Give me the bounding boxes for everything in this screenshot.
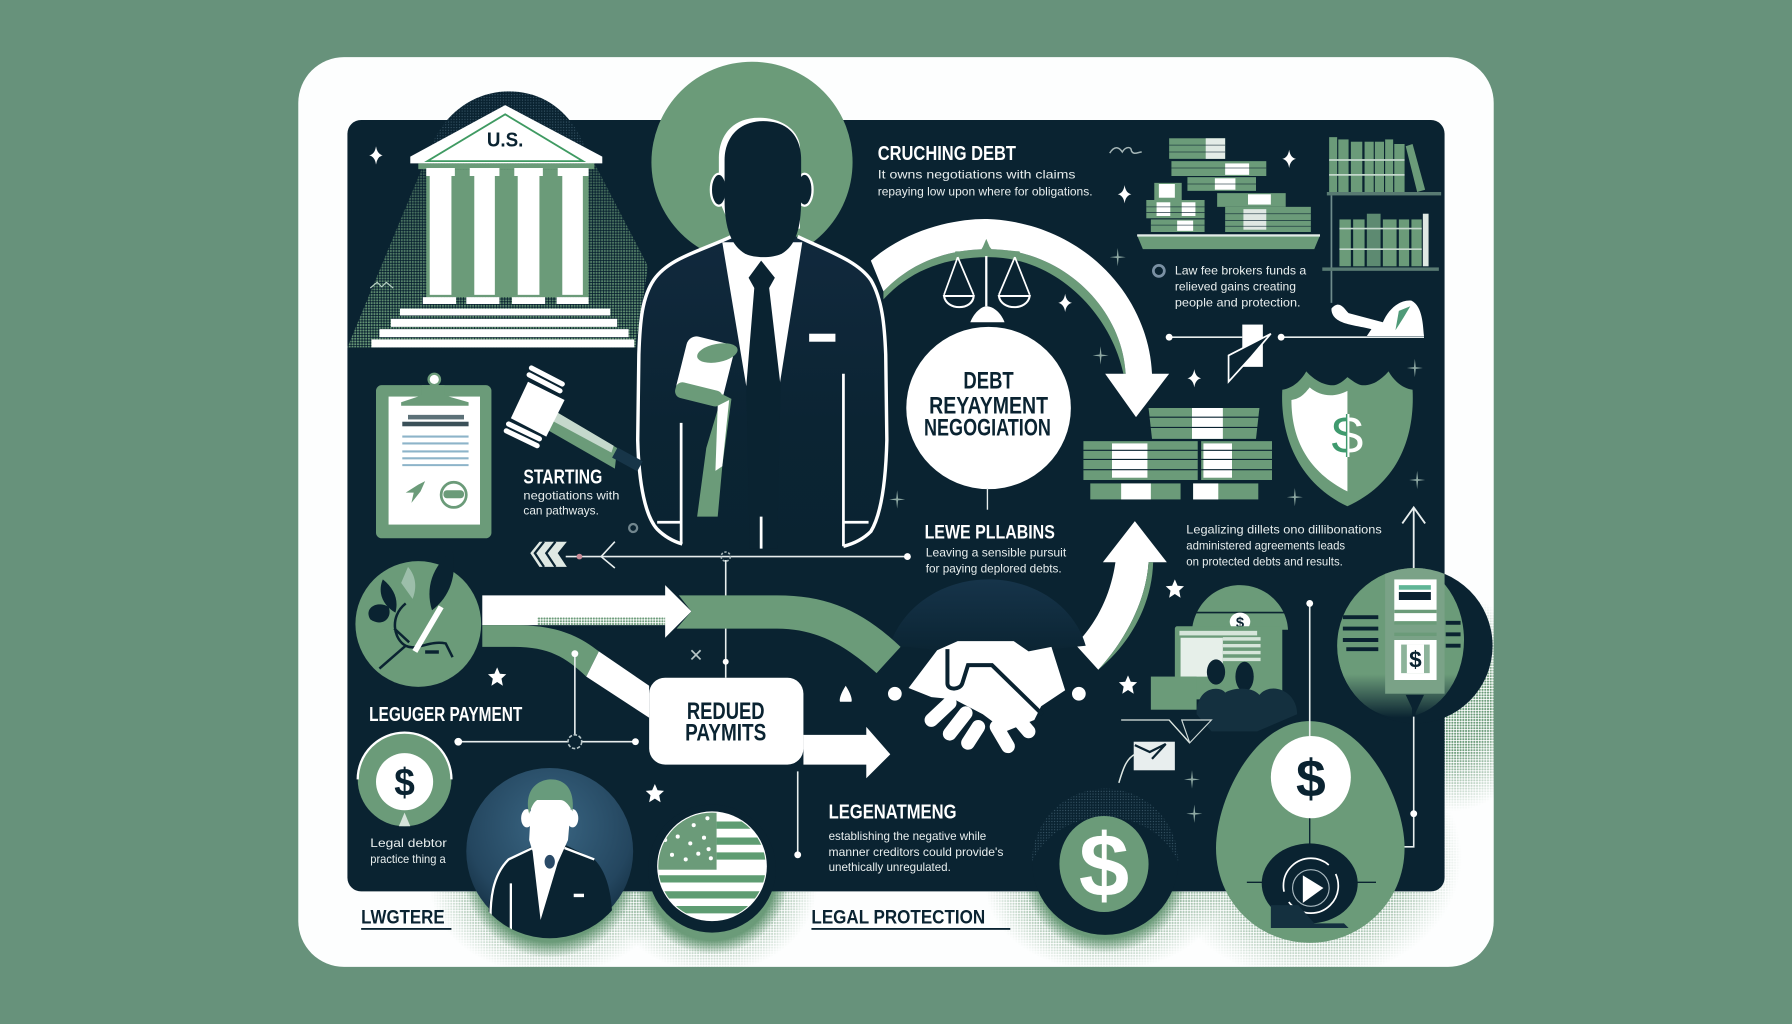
connector: circle to pleadings (986, 488, 988, 510)
text: crushing debt: CRUCHING DEBT (878, 142, 1016, 165)
text: starting: can pathways. (523, 503, 599, 517)
arrow: from box right (803, 727, 890, 778)
band: green upper curve (677, 595, 901, 673)
box: reduced payments: REDUED (687, 698, 765, 725)
pocket square (809, 334, 835, 342)
icon: dollar coin dark: $ (1079, 815, 1129, 915)
icon: dollar badge: $ (394, 761, 415, 804)
arrow: white horizontal (482, 585, 691, 638)
sleeve lines (657, 374, 869, 549)
panel: white card (298, 57, 1494, 967)
text: lewe pleadings: Leaving a sensible pursuit (926, 546, 1067, 560)
figure: man in suit (638, 118, 887, 549)
text: lewe pleadings (925, 521, 1067, 576)
icon: stars left (488, 650, 852, 802)
icon: audience and screen: $ (1236, 615, 1245, 631)
label: legal protection: LEGAL PROTECTION (811, 906, 985, 928)
arrow: curved up (1075, 521, 1167, 670)
icon: shield with dollar: $ (1331, 407, 1363, 466)
text: starting (523, 465, 619, 517)
shirt (722, 242, 802, 386)
icon: document circle (1337, 568, 1493, 718)
text: legenatmeng: establishing the negative while (829, 829, 987, 843)
text: legenatmeng: LEGENATMENG (829, 800, 957, 823)
decor: small ring (629, 524, 637, 532)
box: reduced payments: PAYMITS (685, 720, 766, 747)
box: reduced payments (649, 678, 803, 765)
icon: lawyer portrait (466, 768, 633, 949)
text: law note: relieved gains creating (1175, 279, 1296, 293)
arrow: small pennant (1121, 720, 1211, 743)
icon: small bird (370, 282, 393, 288)
icon: scales (944, 239, 1030, 322)
icon: sparkle near courthouse (369, 146, 383, 165)
icon: handshake (888, 579, 1086, 746)
text: law note: Law fee brokers funds a (1175, 263, 1307, 277)
text: legal note: Legal debtor (370, 836, 447, 850)
icon: hand with leaf (1331, 300, 1424, 336)
icon: green egg with dollar and video: $ (1296, 750, 1326, 809)
icon: sparkles around circle (889, 294, 1201, 509)
text: lewe pleadings: for paying deplored debts. (926, 562, 1062, 576)
icon: cash bundles (1083, 408, 1272, 499)
icon: envelope with curve (1119, 742, 1175, 783)
text: legal detail: administered agreements leads (1186, 539, 1345, 553)
arrow: chevrons pointing left (530, 542, 567, 567)
text: legal note (370, 836, 447, 866)
text: starting: STARTING (523, 465, 602, 488)
icon: gavel (506, 368, 640, 469)
band: white lower segment (586, 651, 649, 718)
icon: money stacks on shelf (1137, 138, 1320, 249)
icon: document circle: $ (1409, 646, 1422, 672)
text: crushing debt: It owns negotiations with claims (878, 167, 1075, 181)
text: starting: negotiations with (523, 488, 619, 502)
connector: main horizontal (566, 542, 911, 678)
icon: green egg with dollar and video (1216, 600, 1405, 943)
icon: bookshelf (1322, 137, 1441, 303)
icon: dollar badge (358, 733, 451, 826)
tie (746, 261, 781, 549)
icon: audience and screen (1151, 585, 1297, 731)
icon: flag circle (652, 811, 772, 933)
text: legenatmeng: unethically unregulated. (829, 860, 951, 874)
label: U.S.: U.S. (487, 128, 523, 151)
icon: video player (1247, 843, 1376, 928)
icon: courthouse (371, 105, 634, 347)
text: law note (1153, 263, 1307, 309)
arrow: thin up (1402, 507, 1425, 574)
band: green lower curve (482, 625, 599, 677)
text: legal detail (1186, 523, 1382, 569)
spotlight under courthouse (347, 150, 648, 347)
head (719, 118, 800, 229)
circle: debt repayment negotiation: NEGOGIATION (924, 414, 1051, 441)
circle: debt repayment negotiation: DEBT (963, 368, 1014, 395)
circle: debt repayment negotiation (906, 327, 1071, 489)
text: crushing debt (878, 142, 1093, 198)
suit (638, 237, 887, 546)
connector: under box (794, 771, 801, 858)
icon: sparkles near stacks (1110, 150, 1296, 266)
text: legenatmeng: manner creditors could provide's (829, 845, 1003, 859)
text: legal detail: Legalizing dillets ono dillibonations (1186, 523, 1382, 537)
icon: sparkles around shield (1287, 359, 1425, 506)
panel: dark main area (347, 120, 1445, 891)
connector: right line (1403, 717, 1417, 847)
text: legenatmeng (829, 800, 1003, 874)
text: ledger payment: LEGUGER PAYMENT (369, 703, 523, 726)
decor: squiggle (1110, 148, 1142, 153)
halo: spray under lower circles (430, 594, 1541, 981)
label: lwgtere: LWGTERE (361, 906, 445, 928)
text: crushing debt: repaying low upon where for obligations. (878, 184, 1093, 198)
connector: left junction (454, 650, 639, 749)
circle: debt repayment negotiation: REYAYMENT (929, 393, 1048, 420)
arrow: curved down to money (871, 219, 1169, 417)
icon: sparkles lower right (1119, 579, 1202, 823)
text: law note: people and protection. (1175, 295, 1301, 309)
icon: dollar coin dark (1032, 789, 1178, 935)
icon: shield with dollar: $ (1331, 407, 1363, 466)
icon: plant circle (355, 551, 481, 687)
text: legal detail: on protected debts and results. (1186, 555, 1343, 569)
gavel in hand (674, 329, 743, 410)
connector: mid right with pennant (1166, 325, 1424, 382)
icon: clipboard (376, 374, 491, 538)
icon: shield with dollar (1282, 371, 1413, 506)
text: legal note: practice thing a (370, 852, 446, 866)
icon: dark dome behind courthouse (425, 91, 592, 166)
icon: green halo behind head (651, 62, 853, 263)
text: lewe pleadings: LEWE PLLABINS (925, 521, 1055, 543)
